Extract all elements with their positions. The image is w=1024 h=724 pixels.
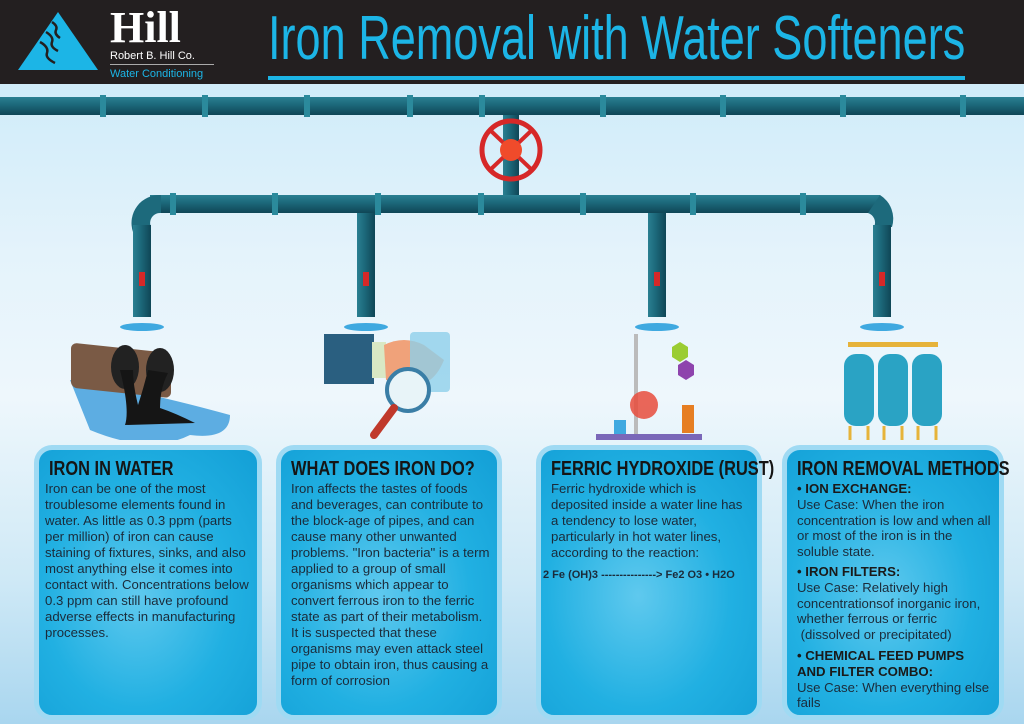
icon: filter tanks xyxy=(844,342,942,440)
panel: iron in water xyxy=(34,445,262,720)
logo: Robert B. Hill Co. xyxy=(110,50,195,62)
panel: what does iron do xyxy=(276,445,502,720)
icon: pipe with iron sludge xyxy=(70,343,230,440)
title: Iron Removal with Water Softeners xyxy=(268,4,965,73)
header bar xyxy=(0,0,1024,84)
icon: hand with glass and magnifier xyxy=(324,332,450,439)
logo: Water Conditioning xyxy=(110,68,203,80)
text: what does iron do: Iron affects the tastes of foods and beverages, can contribute to the block-age of pipes, and can cause many other unwanted problems. "Iron bacteria" is a term applied to a group of small organisms which appear to convert ferrous iron to the ferric state as part of their metabolism. It is suspected that these organisms may even attack steel pipe to obtain iron, thus causing a form of corrosion xyxy=(291,481,489,688)
text: methods list xyxy=(797,481,991,710)
text: iron in water: Iron can be one of the most troublesome elements found in water. As little as 0.3 ppm (parts per million) of iron can cause staining of fixtures, sinks, and also most anything else it comes into contact with. Concentrations below 0.3 ppm can still have profound adverse effects in manufacturing processes. xyxy=(45,481,249,640)
text: methods list: • ION EXCHANGE: xyxy=(797,481,912,496)
logo: Hill xyxy=(110,3,181,52)
text: ferric hydroxide: Ferric hydroxide which is deposited inside a water line has a tendency to lose water, particularly in hot water lines, according to the reaction: xyxy=(551,481,742,560)
text: methods list: Use Case: Relatively high concentrationsof inorganic iron, whether ferrous or ferric (dissolved or precipitated) xyxy=(797,580,980,642)
heading: ferric hydroxide: FERRIC HYDROXIDE (RUST) xyxy=(551,458,774,480)
heading: iron removal methods: IRON REMOVAL METHODS xyxy=(797,458,1010,480)
valve xyxy=(482,121,540,179)
pipe network xyxy=(0,95,1024,331)
text: methods list: • CHEMICAL FEED PUMPS AND FILTER COMBO: xyxy=(797,648,964,679)
panel: ferric hydroxide xyxy=(536,445,762,720)
reaction formula: 2 Fe (OH)3 ---------------> Fe2 O3 • H2O xyxy=(543,569,735,581)
heading: iron in water: IRON IN WATER xyxy=(49,458,174,480)
heading: what does iron do: WHAT DOES IRON DO? xyxy=(291,458,475,480)
text: methods list: Use Case: When the iron concentration is low and when all or most of the iron is in the soluble state. xyxy=(797,497,991,559)
text: methods list: Use Case: When everything else fails xyxy=(797,680,989,710)
logo xyxy=(18,3,214,80)
panel: iron removal methods xyxy=(782,445,1004,720)
icon: lab equipment xyxy=(596,334,702,440)
text: methods list: • IRON FILTERS: xyxy=(797,564,900,579)
